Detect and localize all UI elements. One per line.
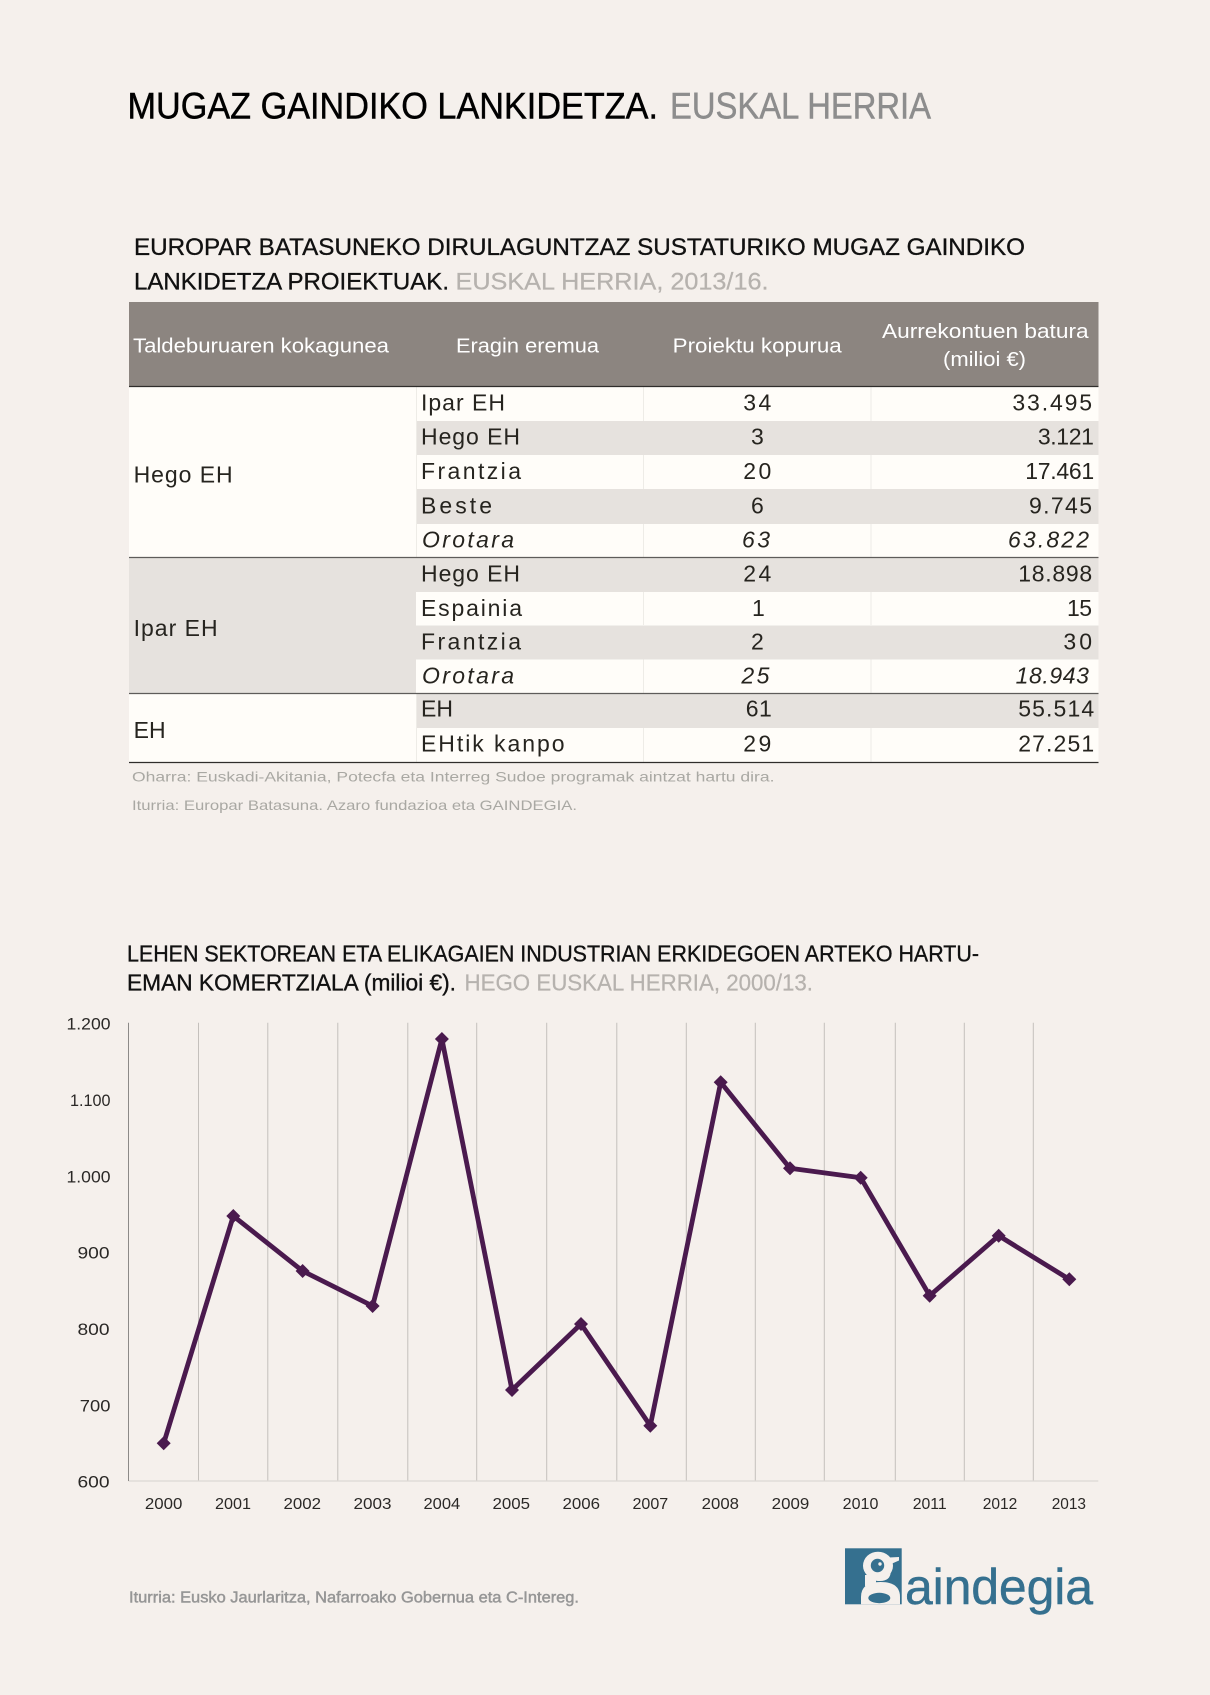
x axis labels: 2007 <box>632 1496 668 1513</box>
row group: Ipar EH: 24 <box>743 561 772 587</box>
table header row: Proiektu kopurua <box>673 336 843 358</box>
row group: Hego EH: Beste <box>421 492 492 518</box>
heading: table title: EUROPAR BATASUNEKO DIRULAGUNTZAZ SUSTATURIKO MUGAZ GAINDIKO <box>134 234 1025 261</box>
x axis labels: 2011 <box>913 1496 947 1513</box>
heading: table title: LANKIDETZA PROIEKTUAK. <box>134 268 449 295</box>
table notes: Iturria: Europar Batasuna. Azaro fundazioa eta GAINDEGIA. <box>132 797 577 813</box>
panel: projects table <box>129 302 1098 763</box>
row group: Ipar EH: Hego EH <box>421 561 520 587</box>
y axis labels: 600 <box>78 1472 110 1491</box>
row group: EH: EH <box>134 717 166 743</box>
row group: Ipar EH: 25 <box>740 662 770 688</box>
row group: EH: EH <box>421 696 453 722</box>
x axis labels: 2000 <box>145 1496 183 1513</box>
line chart <box>66 1014 1098 1513</box>
row group: Ipar EH: Espainia <box>421 595 522 621</box>
row group: Ipar EH: 18.898 <box>1018 561 1092 587</box>
row group: Ipar EH: 18.943 <box>1016 662 1089 688</box>
row group: Ipar EH: Orotara <box>422 662 514 688</box>
row group: Hego EH: Hego EH <box>421 423 520 449</box>
y axis labels: 700 <box>80 1397 110 1416</box>
heading: chart title <box>127 941 979 996</box>
row group: Ipar EH: 30 <box>1063 628 1092 654</box>
data line with markers <box>157 1032 1076 1450</box>
table header row <box>129 302 1098 386</box>
row group: EH <box>134 696 1094 757</box>
y axis labels <box>66 1014 110 1491</box>
title: MUGAZ GAINDIKO LANKIDETZA. <box>128 85 658 126</box>
row group: Ipar EH: 1 <box>752 595 765 621</box>
row group: Hego EH: 34 <box>743 390 772 416</box>
row group: EH: 55.514 <box>1018 696 1094 722</box>
row group: Ipar EH <box>134 561 1092 688</box>
x axis labels: 2013 <box>1052 1496 1086 1513</box>
y axis labels: 900 <box>78 1244 110 1263</box>
x axis labels <box>145 1496 1086 1513</box>
row group: Hego EH: 63.822 <box>1008 526 1089 552</box>
x axis labels: 2009 <box>772 1496 809 1513</box>
y axis labels: 1.200 <box>66 1014 110 1033</box>
row group: Hego EH: 9.745 <box>1029 492 1092 518</box>
table header row: Eragin eremua <box>456 336 600 358</box>
heading: chart title: LEHEN SEKTOREAN ETA ELIKAGAIEN INDUSTRIAN ERKIDEGOEN ARTEKO HARTU- <box>127 941 979 967</box>
logo: gaindegia <box>845 1538 1093 1615</box>
y axis labels: 800 <box>78 1320 110 1339</box>
row group: Hego EH: 6 <box>751 492 764 518</box>
row group: EH: 61 <box>746 696 772 722</box>
row group: Ipar EH: 15 <box>1067 595 1092 621</box>
row group: EH: 27.251 <box>1018 731 1094 757</box>
row group: Hego EH: 20 <box>743 458 771 484</box>
x axis labels: 2010 <box>843 1496 879 1513</box>
table row backgrounds <box>129 386 1098 763</box>
table header row: Aurrekontuen batura <box>882 321 1090 343</box>
x axis labels: 2003 <box>354 1496 392 1513</box>
row group: Ipar EH: 2 <box>751 628 764 654</box>
row group: Hego EH <box>134 390 1094 552</box>
row group: Hego EH: 63 <box>742 526 770 552</box>
row group: EH: EHtik kanpo <box>421 731 564 757</box>
x axis labels: 2008 <box>702 1496 739 1513</box>
row group: Hego EH: Orotara <box>422 526 514 552</box>
row group: Hego EH: 3 <box>751 423 764 449</box>
heading: chart title: EMAN KOMERTZIALA (milioi €). <box>127 970 456 996</box>
row group: Ipar EH: Frantzia <box>421 628 521 654</box>
row group: Hego EH: Frantzia <box>421 458 521 484</box>
table header row: (milioi €) <box>943 349 1026 371</box>
x axis labels: 2005 <box>492 1496 530 1513</box>
heading: table title: EUSKAL HERRIA, 2013/16. <box>456 268 768 295</box>
y axis labels: 1.100 <box>70 1091 110 1110</box>
row group: Hego EH: 33.495 <box>1012 390 1092 416</box>
logo: gaindegia: aindegia <box>905 1559 1093 1615</box>
row group: Hego EH: Hego EH <box>134 462 233 488</box>
row group: Hego EH: Ipar EH <box>421 390 505 416</box>
row group: Hego EH: 17.461 <box>1025 458 1094 484</box>
chart source note: Iturria: Eusko Jaurlaritza, Nafarroako Gobernua eta C-Intereg. <box>129 1590 579 1607</box>
y axis labels: 1.000 <box>66 1168 110 1187</box>
x axis labels: 2004 <box>424 1496 460 1513</box>
table notes: Oharra: Euskadi-Akitania, Potecfa eta Interreg Sudoe programak aintzat hartu dira. <box>132 769 774 785</box>
title: EUSKAL HERRIA <box>670 85 931 126</box>
x axis labels: 2002 <box>284 1496 321 1513</box>
heading: chart title: HEGO EUSKAL HERRIA, 2000/13. <box>464 970 813 996</box>
row group: EH: 29 <box>743 731 771 757</box>
x axis labels: 2001 <box>215 1496 251 1513</box>
x axis labels: 2012 <box>983 1496 1017 1513</box>
row group: Ipar EH: Ipar EH <box>134 615 218 641</box>
logo: gaindegia: g <box>866 1538 895 1603</box>
row group: Hego EH: 3.121 <box>1038 423 1094 449</box>
x axis labels: 2006 <box>562 1496 600 1513</box>
heading: table title <box>134 234 1025 295</box>
table notes <box>132 769 774 813</box>
table header row: Taldeburuaren kokagunea <box>133 336 390 358</box>
